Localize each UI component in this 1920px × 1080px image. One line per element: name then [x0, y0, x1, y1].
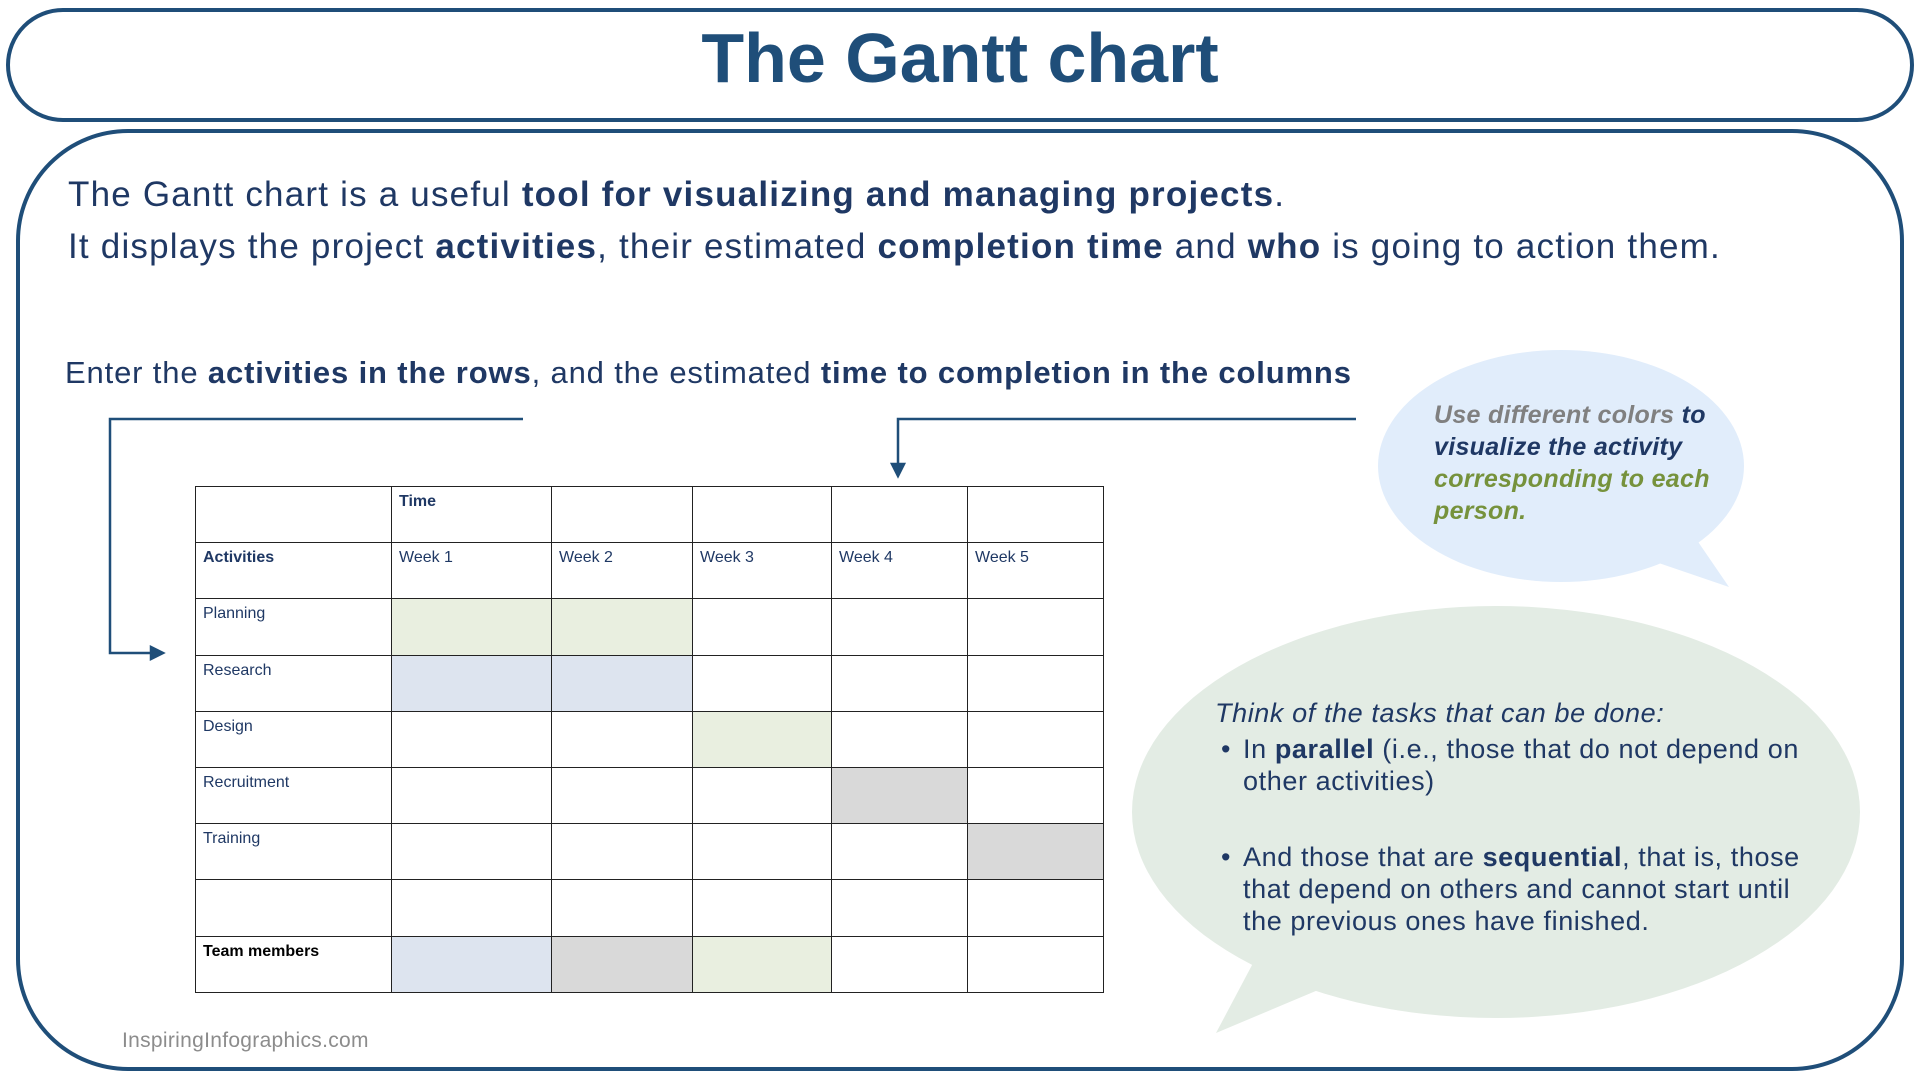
callout: colors: person.: [1434, 497, 1526, 525]
gantt table: Recruitment: [203, 774, 289, 791]
gantt table: Planning: [203, 605, 265, 622]
gantt table: Time: [399, 493, 436, 510]
callout: tasks: •: [1221, 842, 1231, 872]
callout: tasks: In parallel (i.e., those that do not depend on: [1243, 734, 1799, 764]
gantt table: [195, 486, 1104, 993]
callout: tasks: the previous ones have finished.: [1243, 906, 1649, 936]
callout: tasks: other activities): [1243, 766, 1435, 796]
gantt table: Week 1: [399, 549, 453, 566]
gantt table: Week 4: [839, 549, 893, 566]
callout: tasks: And those that are sequential, that is, those: [1243, 842, 1800, 872]
bubble: green: [1132, 606, 1860, 1033]
gantt table: Research: [203, 662, 271, 679]
gantt table: Design: [203, 718, 253, 735]
callout: tasks: Think of the tasks that can be done:: [1215, 698, 1664, 728]
footer credit: InspiringInfographics.com: [122, 1029, 369, 1052]
arrow: to columns: [892, 419, 1356, 476]
gantt table: Activities: [203, 549, 274, 566]
callout: tasks: [1215, 698, 1800, 936]
gantt table: Week 2: [559, 549, 613, 566]
callout: colors: Use different colors to: [1434, 401, 1706, 429]
bubble: blue: [1378, 350, 1744, 587]
callout: colors: visualize the activity: [1434, 433, 1682, 461]
gantt table: Team members: [203, 942, 319, 960]
instruction text: Enter the activities in the rows, and the estimated time to completion in the columns: [65, 355, 1352, 390]
callout: tasks: •: [1221, 734, 1231, 764]
arrow: to rows: [110, 419, 523, 659]
title frame: [8, 10, 1912, 120]
callout: colors: corresponding to each: [1434, 465, 1710, 493]
title: The Gantt chart: [701, 19, 1219, 97]
intro text: It displays the project activities, their estimated completion time and who is going to action them.: [68, 227, 1721, 266]
intro text: [68, 175, 1721, 266]
gantt table: Week 5: [975, 549, 1029, 566]
callout: colors: [1434, 401, 1710, 525]
gantt table: Week 3: [700, 549, 754, 566]
callout: tasks: that depend on others and cannot start until: [1243, 874, 1790, 904]
intro text: The Gantt chart is a useful tool for visualizing and managing projects.: [68, 175, 1285, 214]
gantt table: Training: [203, 830, 260, 847]
